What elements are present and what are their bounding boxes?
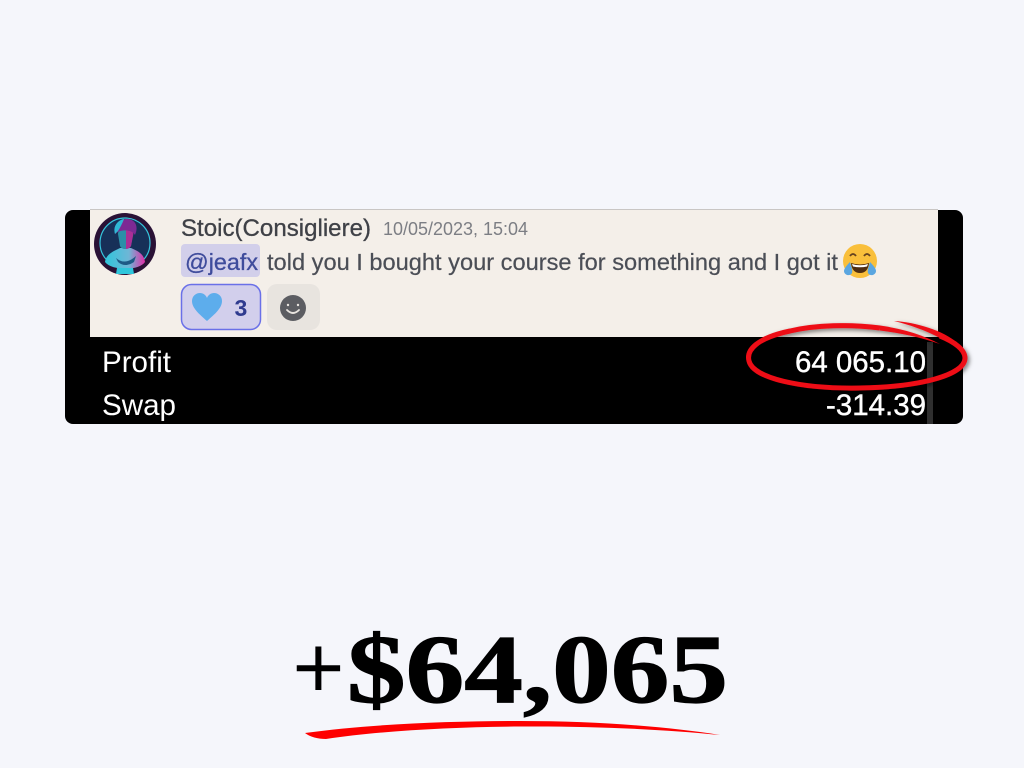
mention tag: @jeafx	[185, 249, 258, 275]
screenshot card	[65, 209, 963, 424]
avatar: stoic bust	[94, 213, 156, 275]
headline amount	[293, 616, 728, 724]
dollar figure: $64,065	[347, 616, 728, 724]
profit label: Profit	[102, 346, 171, 379]
message text: told you I bought your course for something and I got it	[267, 249, 838, 275]
icon: blue heart	[192, 293, 222, 321]
swap label: Swap	[102, 389, 176, 422]
username: Stoic(Consigliere)	[181, 215, 371, 242]
red hand-drawn ellipse around profit	[749, 321, 965, 388]
profit value: 64 065.10	[795, 346, 926, 379]
reaction: heart count	[182, 284, 260, 330]
icon: laughing emoji	[843, 244, 877, 278]
reaction count: 3	[234, 295, 247, 321]
panel: chat message background	[90, 210, 938, 337]
swap value: -314.39	[826, 389, 926, 422]
timestamp: 10/05/2023, 15:04	[383, 219, 528, 239]
plus sign: +	[293, 619, 344, 718]
red underline stroke	[305, 721, 720, 739]
add reaction button	[267, 284, 320, 330]
